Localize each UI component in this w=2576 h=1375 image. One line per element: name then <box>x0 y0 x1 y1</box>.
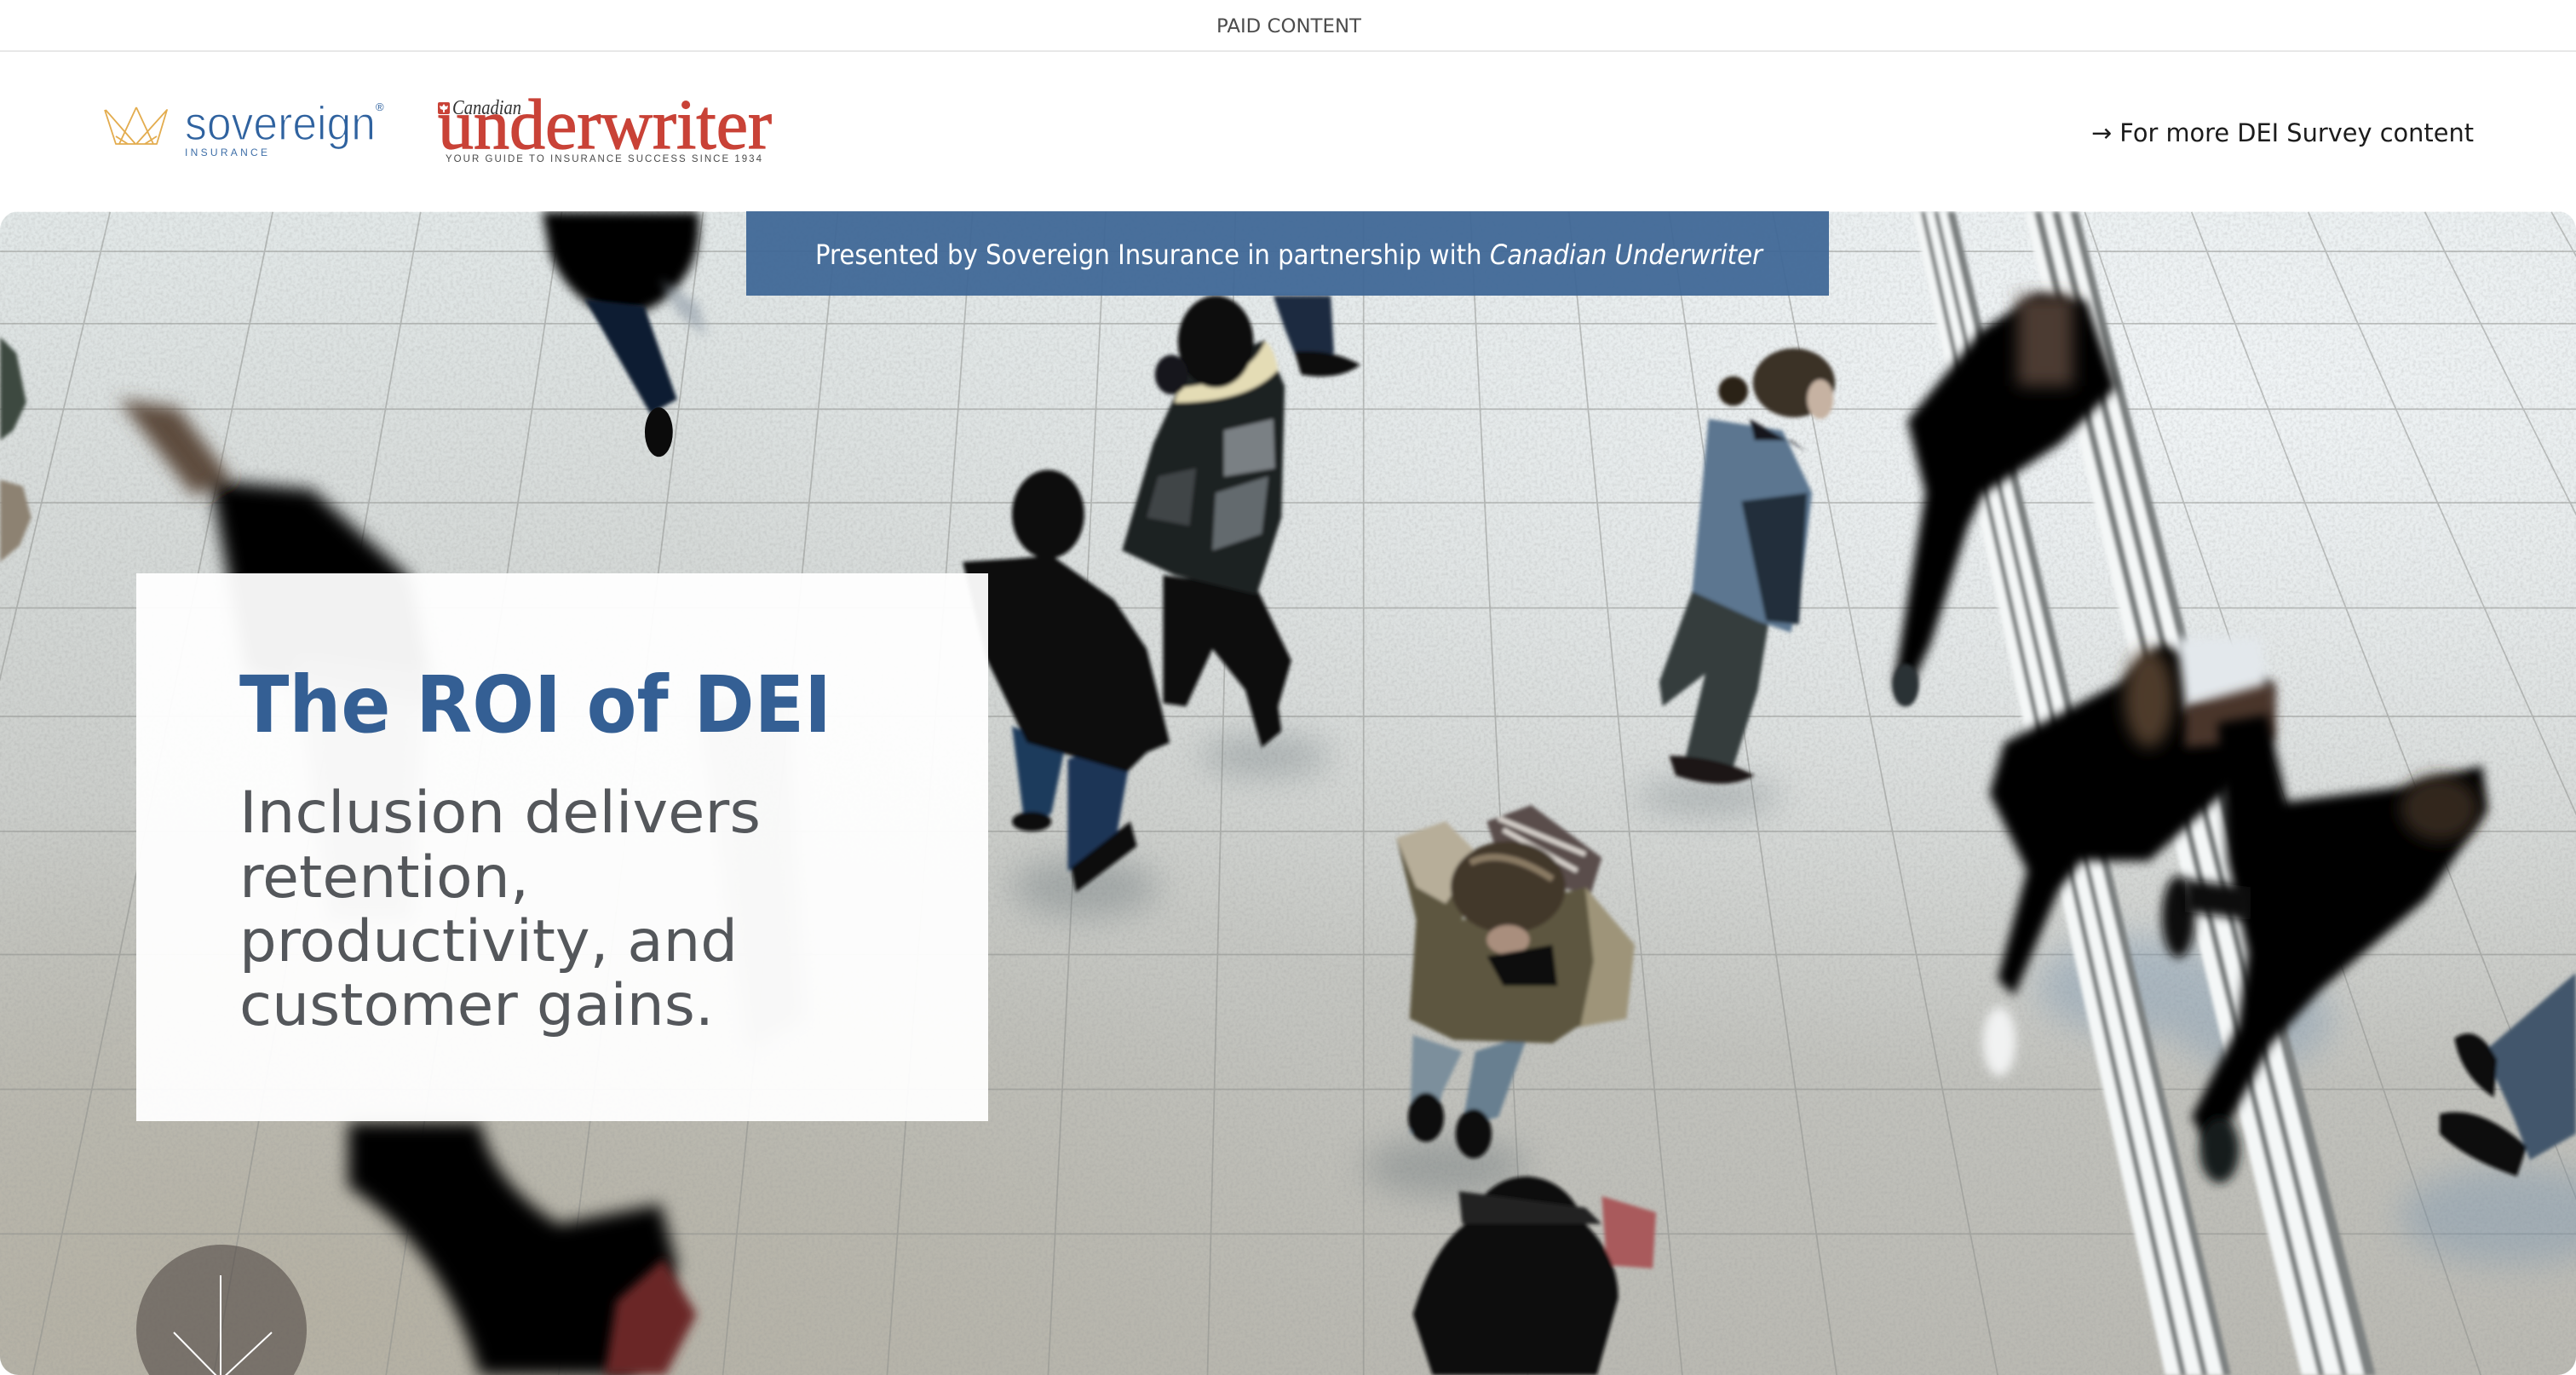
person: woman at bottom <box>1413 1177 1656 1375</box>
person: legs at top centre <box>1274 296 1360 377</box>
floor shadows under people <box>1010 736 2576 1265</box>
person: ponytail woman in denim <box>1659 348 1835 784</box>
person: top walker <box>542 212 706 457</box>
top bar: paid content <box>0 0 2576 52</box>
logo: Canadian Underwriter: Canadian <box>452 97 521 119</box>
icon: gold crown <box>105 107 167 144</box>
potted plant at left edge <box>0 337 32 562</box>
person: plaid jacket <box>1122 296 1291 747</box>
subtitle: retention, <box>239 844 529 912</box>
logo: Sovereign Insurance: ® <box>376 101 384 113</box>
title: The ROI of DEI <box>239 659 831 751</box>
subtitle: Inclusion delivers <box>239 780 761 847</box>
icon: scroll down arrow <box>136 1245 307 1375</box>
person: dark jacket man <box>963 470 1170 892</box>
logo: Canadian Underwriter: underwriter <box>438 85 772 164</box>
link: more DEI survey content: → For more DEI Survey content <box>2091 118 2474 147</box>
subtitle <box>239 780 761 1039</box>
panel: title card <box>136 573 988 1121</box>
logo: Sovereign Insurance: INSURANCE <box>185 147 267 158</box>
logo: Sovereign Insurance: sovereign <box>185 96 376 150</box>
tactile stripes <box>1912 212 2376 1375</box>
person: woman with backpack <box>1396 805 1635 1159</box>
logo: Sovereign Insurance <box>105 96 384 158</box>
person: legs at bottom right <box>2440 973 2576 1177</box>
banner: presented by <box>746 211 1829 296</box>
subtitle: productivity, and <box>239 908 738 975</box>
icon: maple leaf badge <box>438 102 450 114</box>
banner: presented by: Presented by Sovereign Insurance in partnership with Canadian Underwriter <box>815 239 1764 271</box>
top bar: paid content: PAID CONTENT <box>1216 16 1362 37</box>
person: left blurred walker <box>111 388 422 693</box>
person: blurred runner upper right <box>1893 294 2116 706</box>
subtitle: customer gains. <box>239 972 714 1039</box>
logo: Canadian Underwriter: YOUR GUIDE TO INSURANCE SUCCESS SINCE 1934 <box>446 154 762 164</box>
person: blurred walker below panel <box>348 1122 697 1375</box>
person: blurred runner centre right <box>1983 637 2275 1076</box>
person: blurred runner far right <box>2162 715 2487 1183</box>
